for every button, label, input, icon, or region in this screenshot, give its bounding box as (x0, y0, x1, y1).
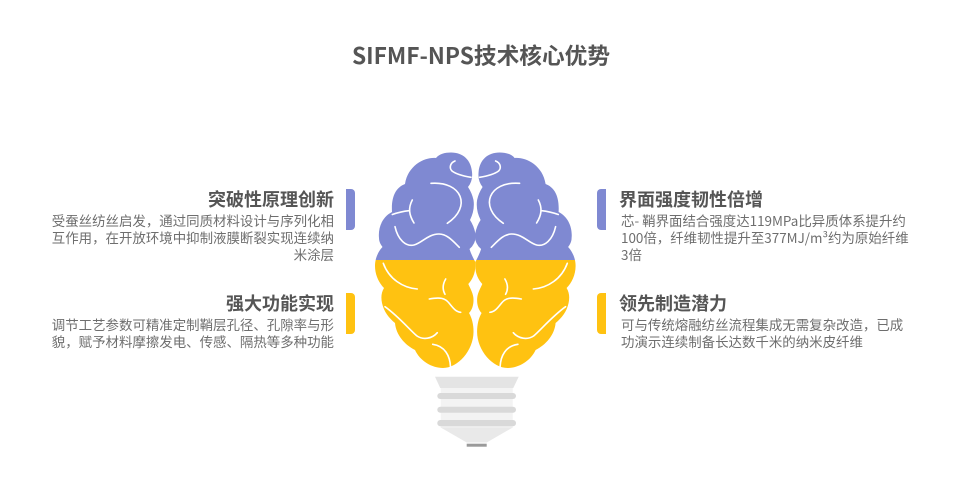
text block: 强大功能实现 description (52, 314, 334, 351)
text block: 领先制造潜力 description: 可与传统熔融纺丝流程集成无需复杂改造，已成 (621, 314, 903, 334)
panel: 强大功能实现 (52, 290, 355, 351)
accent bar: yellow (597, 293, 606, 334)
text block: 强大功能实现 description: 调节工艺参数可精准定制鞘层孔径、孔隙率与形 (52, 314, 334, 334)
text block: 突破性原理创新 description (52, 210, 334, 264)
panel: 领先制造潜力 (597, 290, 903, 351)
heading: 界面强度韧性倍增: 界面强度韧性倍增 (619, 186, 763, 212)
title: SIFMF-NPS技术核心优势 (352, 38, 610, 71)
text block: 界面强度韧性倍增 description: 3倍 (621, 244, 642, 264)
heading: 强大功能实现: 强大功能实现 (226, 290, 334, 316)
heading: 突破性原理创新: 突破性原理创新 (208, 186, 334, 212)
heading: 领先制造潜力: 领先制造潜力 (619, 290, 727, 316)
brain: left hemisphere (375, 152, 476, 368)
text block: 强大功能实现 description: 貌，赋予材料摩擦发电、传感、隔热等多种功能 (52, 331, 334, 351)
panel: 界面强度韧性倍增 (597, 186, 909, 264)
bulb base (435, 377, 519, 447)
panel: 突破性原理创新 (52, 186, 355, 264)
accent bar: blue (346, 189, 354, 230)
accent bar: yellow (346, 293, 354, 334)
text block: 突破性原理创新 description: 受蚕丝纺丝启发，通过同质材料设计与序列化相 (52, 210, 334, 230)
text block: 领先制造潜力 description (621, 314, 903, 351)
text block: 界面强度韧性倍增 description: 芯-鞘界面结合强度达119MPa比异质体系提升约 (621, 210, 906, 230)
text block: 突破性原理创新 description: 互作用，在开放环境中抑制液膜断裂实现连续纳 (52, 227, 334, 247)
icon: brain light bulb (375, 152, 576, 447)
text block: 领先制造潜力 description: 功演示连续制备长达数千米的纳米皮纤维 (621, 331, 863, 351)
brain: right hemisphere (475, 152, 576, 368)
text block: 界面强度韧性倍增 description (621, 210, 909, 264)
text block: 突破性原理创新 description: 米涂层 (294, 244, 334, 264)
text block: 界面强度韧性倍增 description: 100倍，纤维韧性提升至377MJ/m³约为原始纤维 (621, 227, 909, 247)
accent bar: blue (597, 189, 606, 230)
